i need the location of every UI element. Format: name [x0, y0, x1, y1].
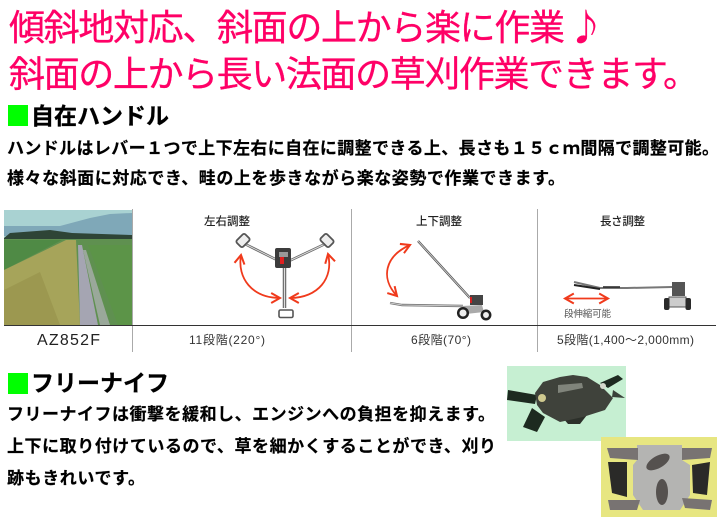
photo: free knife underside [601, 437, 717, 517]
text block: handle description: 様々な斜面に対応でき、畦の上を歩きながら楽な姿勢で作業できます。 [7, 168, 565, 188]
photo: levee and paddy field [4, 210, 132, 325]
text block: handle description: ハンドルはレバー１つで上下左右に自在に調整できる上、長さも１５ｃｍ間隔で調整可能。 [7, 138, 719, 158]
text block: free knife description [7, 405, 496, 488]
text block: handle description [7, 138, 719, 188]
text block: free knife description: フリーナイフは衝撃を緩和し、エンジンへの負担を抑えます。 [7, 405, 495, 424]
arrow: length range [565, 298, 608, 300]
title: 傾斜地対応、斜面の上から楽に作業 [9, 7, 565, 48]
icon: mower rear view [574, 282, 691, 310]
panel: up-down adjustment [387, 214, 490, 347]
label: up-down: 上下調整 [416, 214, 462, 228]
panel: length adjustment [557, 214, 694, 347]
panel: left-right adjustment [189, 214, 334, 347]
title: ♪ [568, 0, 604, 51]
arrow: right sweep [290, 254, 329, 298]
text block: free knife description: 上下に取り付けているので、草を細かくすることができ、刈り [7, 436, 496, 456]
icon: mower top view [236, 233, 334, 318]
label: left-right: 左右調整 [204, 214, 250, 228]
label: extendable: 段伸縮可能 [564, 308, 611, 320]
arrow: left sweep [240, 255, 280, 298]
arrow: up-down sweep [387, 245, 410, 296]
value: left-right: 11段階(220°) [189, 332, 265, 347]
title [9, 0, 699, 94]
icon: mower side view [390, 241, 490, 319]
photo: free knife disc [507, 366, 626, 441]
value: up-down: 6段階(70°) [411, 332, 471, 347]
value: length: 5段階(1,400～2,000mm) [557, 332, 694, 347]
model label: AZ852F [37, 332, 100, 349]
label: length: 長さ調整 [600, 214, 646, 228]
heading: free knife: フリーナイフ [31, 370, 169, 396]
text block: free knife description: 跡もきれいです。 [7, 469, 145, 488]
title: 斜面の上から長い法面の草刈作業できます。 [9, 54, 699, 94]
heading: adjustable handle: 自在ハンドル [31, 103, 169, 129]
